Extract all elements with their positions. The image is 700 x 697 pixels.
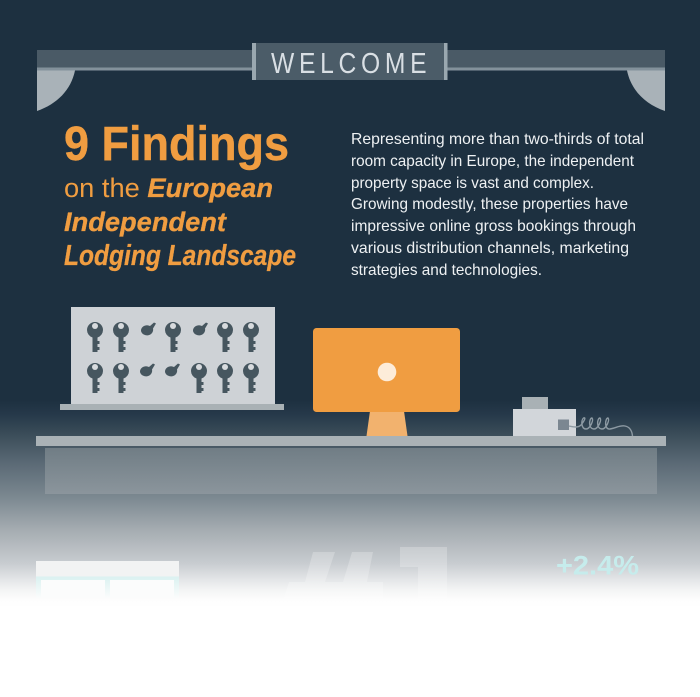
front desk top bbox=[36, 436, 666, 446]
intro text: property space is vast and complex. bbox=[351, 175, 594, 192]
welcome sign: WELCOME bbox=[271, 47, 427, 79]
computer monitor bbox=[313, 328, 460, 436]
title: Lodging Landscape bbox=[64, 240, 296, 272]
welcome sign rail bbox=[37, 50, 665, 70]
faded table bbox=[36, 561, 179, 598]
left corner bracket bbox=[37, 70, 75, 111]
telephone bbox=[513, 397, 632, 436]
intro text: strategies and technologies. bbox=[351, 262, 542, 279]
intro text: various distribution channels, marketing bbox=[351, 240, 629, 257]
front desk panel bbox=[45, 448, 657, 494]
intro text: Representing more than two-thirds of total bbox=[351, 131, 644, 148]
intro text: impressive online gross bookings through bbox=[351, 218, 636, 235]
title bbox=[64, 118, 296, 272]
title: Independent bbox=[64, 207, 227, 237]
key board bbox=[60, 307, 284, 410]
faded large number bbox=[283, 547, 447, 600]
title: on the European bbox=[64, 173, 273, 203]
intro text: room capacity in Europe, the independent bbox=[351, 153, 635, 170]
welcome sign bbox=[252, 43, 448, 80]
intro text: Growing modestly, these properties have bbox=[351, 196, 628, 213]
title: 9 Findings bbox=[64, 118, 289, 171]
right corner bracket bbox=[627, 70, 665, 111]
growth figure: +2.4% bbox=[556, 550, 639, 580]
intro text bbox=[351, 131, 644, 279]
